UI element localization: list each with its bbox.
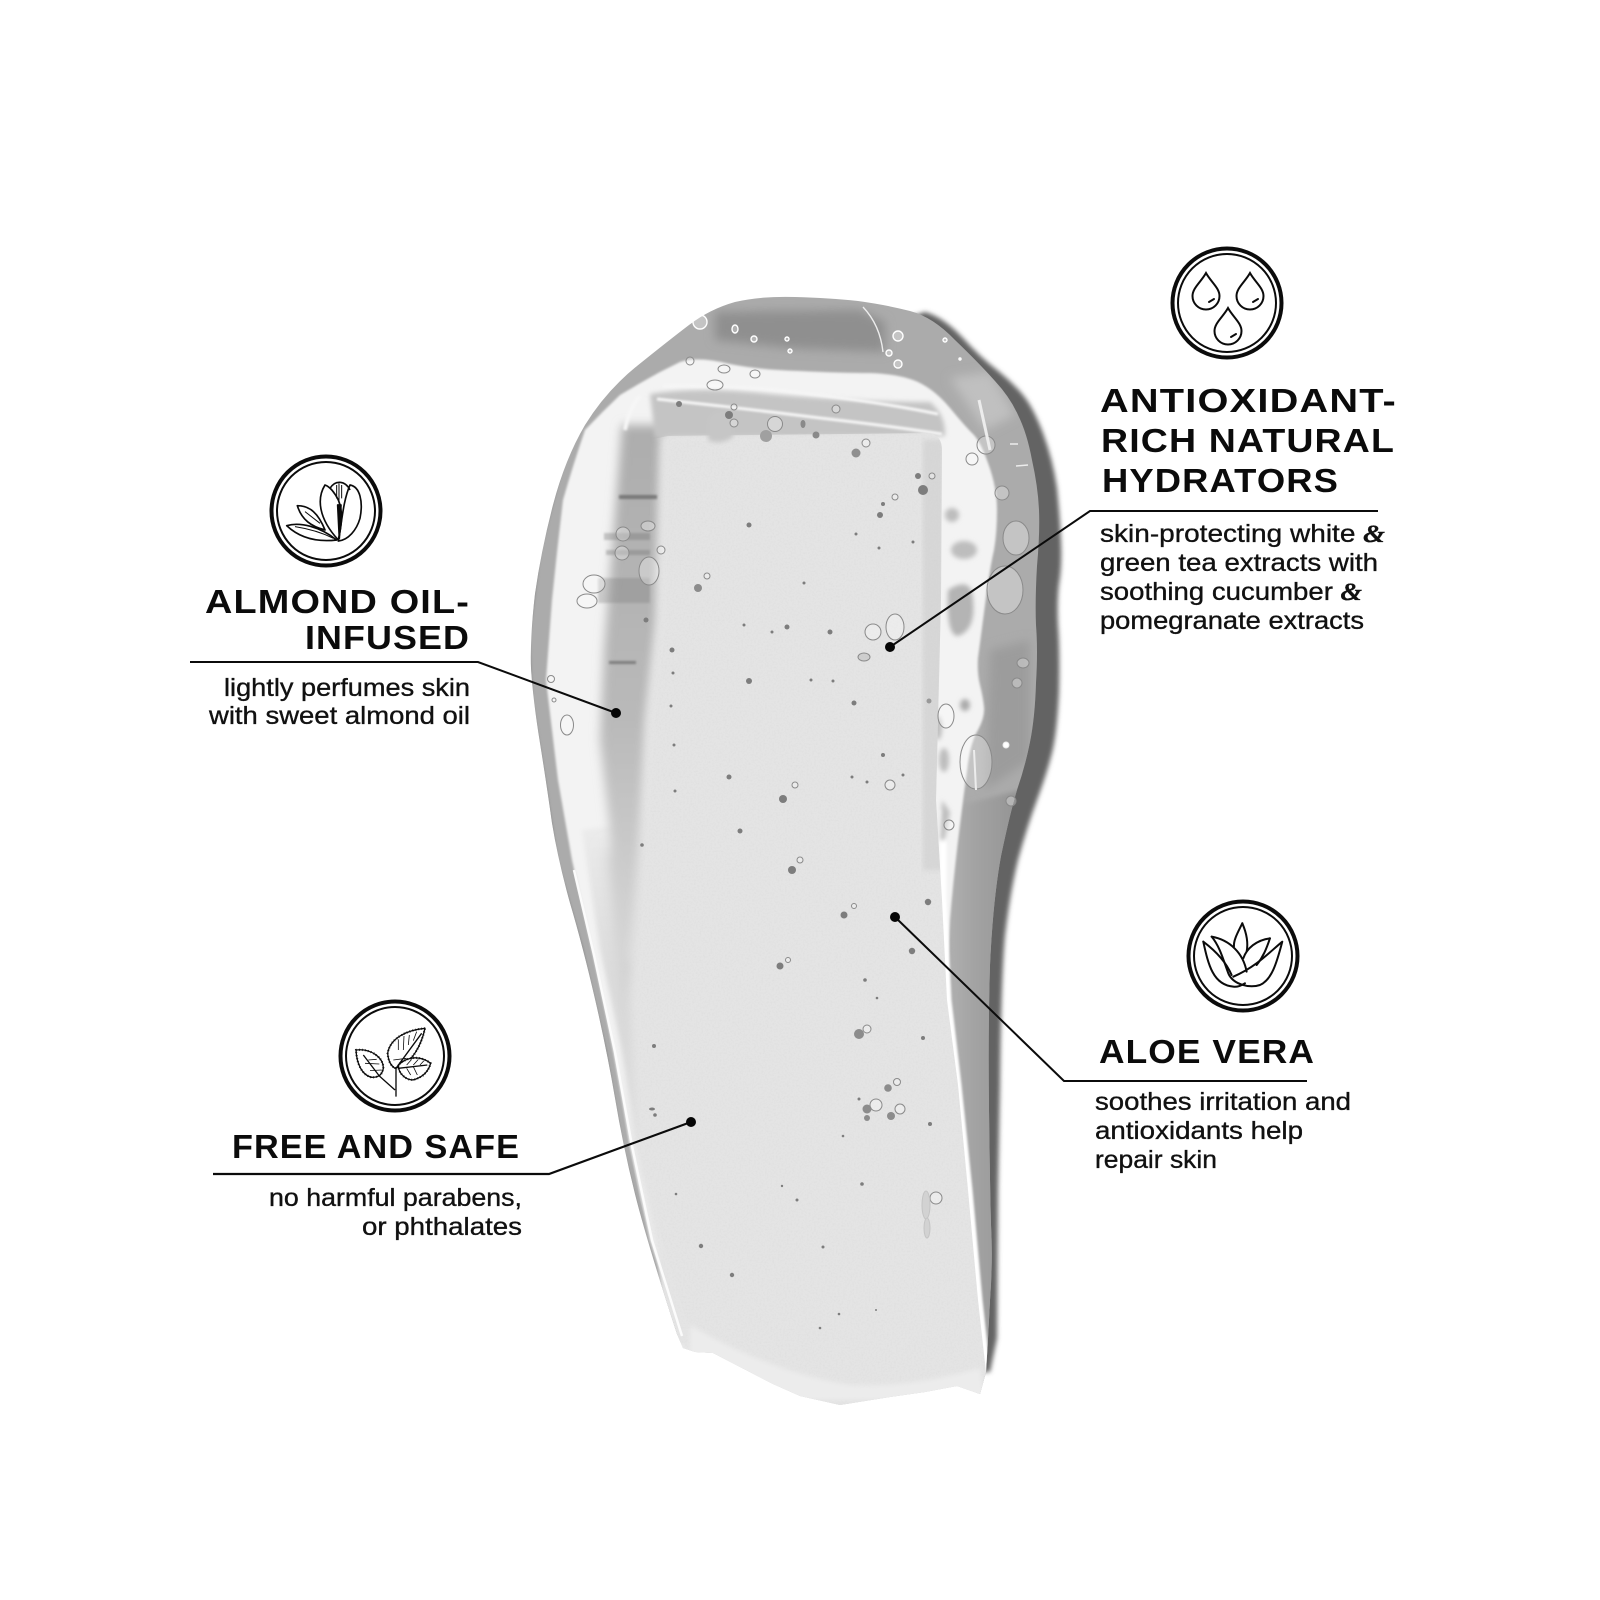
gel: lower left blend [586, 832, 680, 1339]
gel: dark streaks in left band [598, 495, 657, 664]
gel: thin crack highlights [863, 307, 1028, 790]
gel: central textured paper area [628, 433, 986, 1405]
gel: lower left soft gray shading [606, 856, 628, 971]
illustration: clear gel swatch [530, 296, 1065, 1405]
gel drop shadow [900, 312, 1061, 1372]
gel: dark specks [640, 401, 932, 1329]
description: no harmful parabens, [269, 1184, 522, 1212]
description: lightly perfumes skin [224, 674, 470, 702]
heading: ANTIOXIDANT- [1100, 382, 1397, 419]
leader line [885, 511, 1378, 652]
heading: RICH NATURAL [1101, 422, 1395, 459]
leader line [190, 662, 621, 718]
gel: small lower bubble cluster [922, 1191, 930, 1238]
gel: left gray band [595, 420, 664, 860]
description: skin-protecting white & [1100, 520, 1383, 548]
icon: aloe plant [1188, 902, 1298, 1010]
icon: three water drops [1172, 248, 1282, 358]
leader line [890, 912, 1307, 1081]
callout: aloe vera [890, 902, 1351, 1174]
gel: left rim highlight [574, 870, 682, 1336]
gel: right band darker patch [988, 643, 1029, 784]
heading: FREE AND SAFE [232, 1128, 520, 1165]
description: or phthalates [362, 1213, 522, 1241]
description: with sweet almond oil [208, 702, 470, 730]
description: repair skin [1095, 1146, 1217, 1174]
gel: gray pockets in right white zone [934, 508, 977, 840]
heading: ALMOND OIL- [205, 583, 470, 620]
gel: top right lighter corner [954, 372, 1013, 428]
gel body [530, 296, 1040, 1405]
gel: bright right edge highlight [943, 810, 987, 1372]
description: soothing cucumber & [1100, 578, 1360, 606]
description: pomegranate extracts [1100, 607, 1364, 635]
heading: INFUSED [305, 619, 470, 656]
gel: bottom torn edge texture [692, 1330, 981, 1398]
gel: gray bump near top [707, 435, 734, 444]
description: soothes irritation and [1095, 1088, 1351, 1116]
heading: ALOE VERA [1099, 1033, 1315, 1070]
heading: HYDRATORS [1102, 462, 1339, 499]
gel: top medium band [650, 390, 945, 438]
gel: top dark band [715, 310, 885, 352]
gel: air bubbles [548, 315, 1029, 1204]
callout: antioxidant-rich natural hydrators [885, 248, 1397, 652]
leader line [213, 1117, 696, 1174]
callout: almond oil-infused [190, 456, 621, 730]
gel: top band highlights [622, 396, 942, 436]
icon: leaves [340, 1002, 450, 1110]
description: antioxidants help [1095, 1117, 1303, 1145]
description: green tea extracts with [1100, 549, 1378, 577]
icon: almond blossom [272, 456, 380, 566]
gel: white inner plate [546, 359, 997, 1420]
gel: left outer rim [530, 482, 676, 1332]
callout: free and safe [213, 1002, 696, 1241]
gel: lower right band [976, 790, 1016, 1394]
